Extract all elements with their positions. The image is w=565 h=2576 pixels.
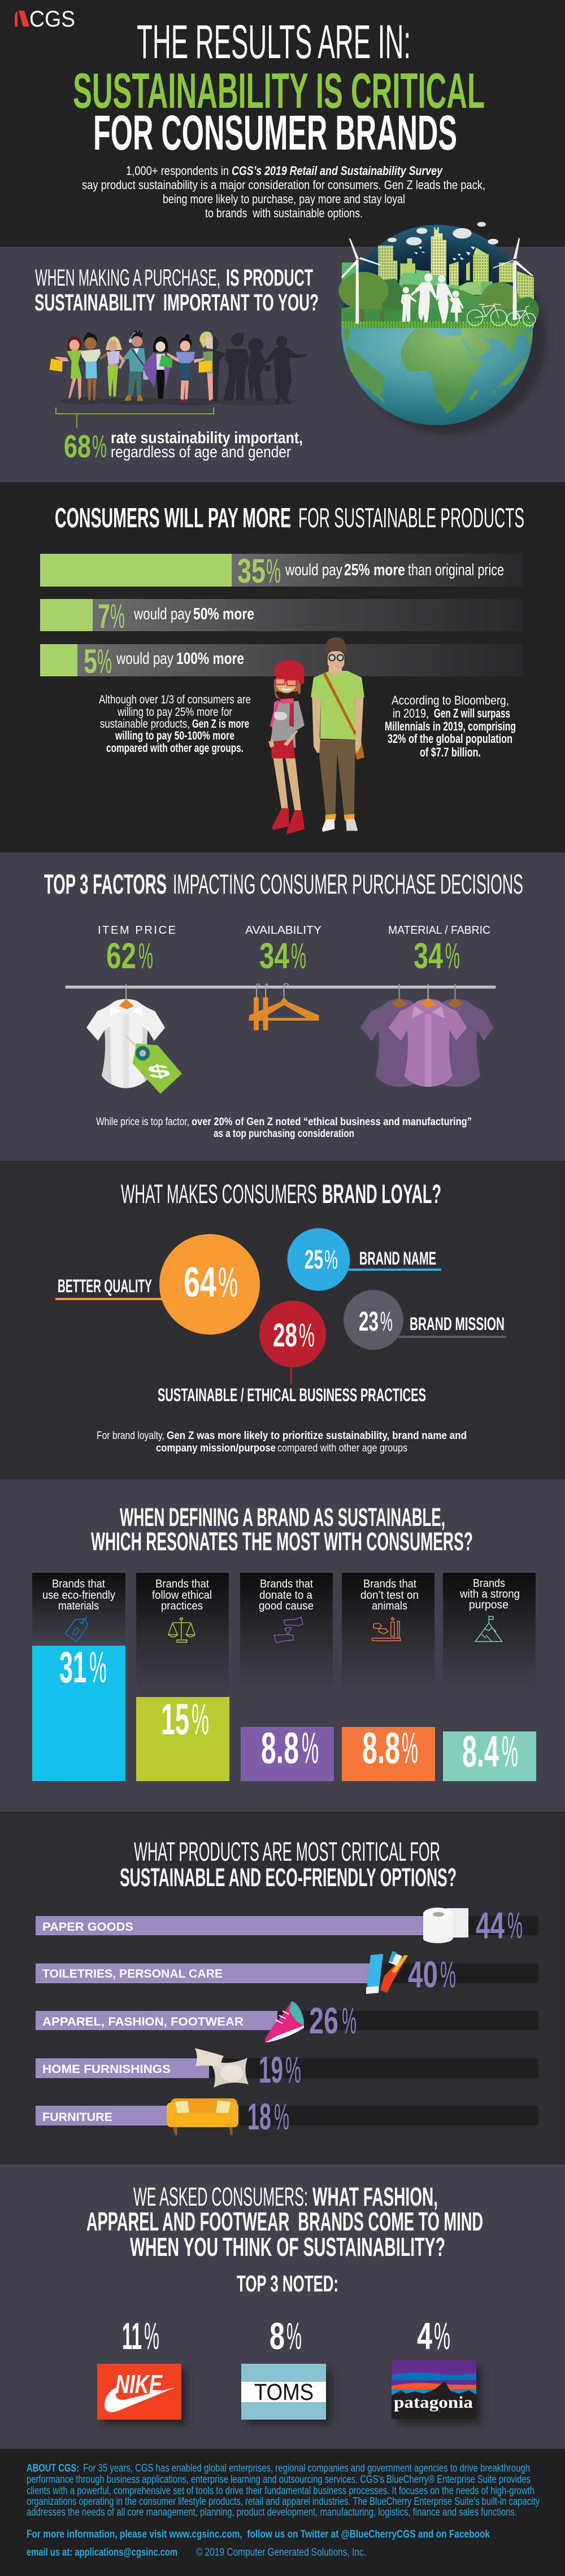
illustration: group of consumers [49, 329, 307, 405]
globe shadow [352, 243, 546, 435]
heading: WHAT FASHION, [312, 2182, 438, 2211]
bar: 35% [40, 552, 523, 590]
column: eco-friendly materials 31%: use eco-friendly [42, 1589, 115, 1602]
text: right note: of $7.7 billion. [420, 745, 481, 759]
column: good cause 8.8%: donate to a [259, 1589, 313, 1602]
bar: home furnishings 19%: HOME FURNISHINGS [42, 2063, 171, 2076]
white shirt [86, 985, 165, 1088]
bar: apparel 26% [36, 2000, 538, 2043]
bar: furniture 18%: % [274, 2096, 289, 2137]
column: eco-friendly materials 31%: materials [58, 1600, 99, 1612]
person 5 [143, 336, 173, 399]
brand: Nike: 11 [122, 2315, 142, 2358]
stat: 68% [64, 428, 303, 465]
globe lower half [341, 328, 533, 425]
column: ethical practices 15%: % [192, 1694, 209, 1744]
intro text: being more likely to purchase, pay more and stay loyal [163, 192, 405, 206]
brand: TOMS: 8 [270, 2315, 285, 2358]
birds [414, 247, 475, 261]
heading: WHAT MAKES CONSUMERS [121, 1179, 317, 1209]
icon: running shoe [265, 2001, 304, 2043]
bar: paper goods 44%: % [507, 1904, 523, 1946]
column: eco-friendly materials 31%: % [89, 1642, 107, 1692]
column: strong purpose 8.4%: purpose [469, 1599, 508, 1611]
factor: material / fabric: % [445, 935, 460, 976]
heading: WHEN MAKING A PURCHASE, [35, 264, 220, 291]
brand: Nike [97, 2315, 187, 2425]
brand: TOMS: TOMS [254, 2379, 314, 2405]
bubble: brand name 25%: BRAND NAME [359, 1248, 436, 1269]
factor: item price: ITEM PRICE [98, 924, 176, 937]
heading: TOP 3 FACTORS [44, 869, 167, 900]
footnote: as a top purchasing consideration [214, 1128, 354, 1140]
bubble: sustainable practices 28% [158, 1301, 426, 1405]
stat: 68%: 68 [64, 428, 91, 465]
intro text: 1,000+ respondents in [126, 164, 229, 178]
heading [86, 2182, 483, 2262]
text: right note: in 2019, [393, 706, 429, 720]
bubble: brand mission 23% [344, 1290, 506, 1350]
footnote: Gen Z was more likely to prioritize sustainability, brand name and [167, 1430, 467, 1442]
price tag [125, 1035, 182, 1094]
title [73, 15, 485, 160]
intro text: CGS’s 2019 Retail and Sustainability Survey [232, 164, 443, 178]
heading: WE ASKED CONSUMERS: [133, 2182, 308, 2211]
column: eco-friendly materials 31%: Brands that [52, 1578, 105, 1590]
contact links [27, 2529, 490, 2558]
bar: 7%: % [110, 597, 125, 635]
section: footer [0, 2449, 565, 2576]
stat: 68%: rate sustainability important, [111, 429, 303, 447]
column: eco-friendly materials 31%: 31 [59, 1642, 86, 1692]
factor: item price: % [138, 935, 153, 976]
about text: ABOUT CGS: [27, 2463, 79, 2474]
column: ethical practices 15%: follow ethical [152, 1589, 212, 1602]
column: no animal testing 8.8% [342, 1573, 435, 1781]
column: good cause 8.8%: Brands that [260, 1578, 313, 1590]
bar: toiletries 40%: 40 [408, 1953, 438, 1995]
brand: Patagonia: % [434, 2315, 450, 2358]
person 3 [106, 336, 125, 397]
brand: TOMS: % [286, 2315, 302, 2358]
empty hangers [249, 983, 319, 1030]
logo: CGS: CGS [29, 7, 75, 32]
brand: Nike: % [144, 2315, 159, 2358]
bubble: brand name 25%: % [324, 1244, 338, 1274]
column: no animal testing 8.8%: Brands that [363, 1578, 416, 1590]
bar: home furnishings 19%: 19 [259, 2049, 283, 2090]
section: brand loyalty [0, 1161, 565, 1480]
bar: toiletries 40% [36, 1951, 538, 1995]
bar: 7%: 50% more [193, 605, 254, 623]
bar: 5%: would pay [116, 650, 173, 668]
bar: 35%: 35 [237, 552, 266, 590]
bar: furniture 18%: 18 [247, 2096, 271, 2137]
column: strong purpose 8.4%: with a strong [459, 1588, 520, 1600]
factor: item price [98, 924, 176, 976]
factor: material / fabric: MATERIAL / FABRIC [388, 924, 490, 937]
column: strong purpose 8.4%: Brands [473, 1577, 505, 1590]
bubble: brand name 25% [287, 1228, 441, 1291]
factor: availability: 34 [259, 935, 289, 976]
skyline [342, 263, 356, 281]
bubble: brand mission 23%: 23 [359, 1307, 379, 1337]
bar: 35%: than original price [408, 561, 504, 579]
bar: 7%: would pay [133, 605, 191, 623]
text: left note: compared with other age groups. [106, 742, 244, 755]
person 7, half coloured [199, 331, 213, 401]
bar: furniture 18% [36, 2096, 538, 2137]
column: no animal testing 8.8%: % [402, 1723, 418, 1773]
globe upper half [338, 222, 539, 328]
text: left note: Gen Z is more [192, 718, 249, 731]
text: right note: Gen Z will surpass [434, 706, 510, 720]
heading [44, 869, 523, 900]
heading: IS PRODUCT [226, 264, 313, 291]
girl [268, 660, 305, 834]
footnote: For brand loyalty, [97, 1430, 164, 1442]
icon: paper roll [423, 1908, 468, 1943]
illustration: gen z characters [268, 637, 364, 834]
text: right note: 32% of the global population [388, 732, 512, 746]
family [401, 273, 464, 323]
wind turbines [341, 238, 533, 323]
bar: paper goods 44%: PAPER GOODS [42, 1921, 133, 1934]
heading: BRAND LOYAL? [322, 1179, 441, 1209]
clothes rail [65, 986, 496, 989]
bar: 5%: % [97, 642, 112, 680]
purple shirts, back [360, 984, 494, 1087]
heading: CONSUMERS WILL PAY MORE [55, 503, 291, 533]
bubble: better quality 64%: 64 [184, 1258, 216, 1306]
price tag: $ [145, 1060, 173, 1082]
factor: availability: AVAILABILITY [245, 924, 321, 937]
heading [91, 1503, 473, 1556]
section: defining sustainable brands [0, 1480, 565, 1812]
intro text [82, 164, 485, 220]
bar: apparel 26%: % [342, 2000, 357, 2041]
about text [27, 2463, 540, 2518]
bar: paper goods 44% [36, 1904, 538, 1946]
bar: paper goods 44%: 44 [476, 1904, 505, 1946]
bubble: brand mission 23%: BRAND MISSION [410, 1314, 505, 1334]
bubble: brand mission 23%: % [380, 1307, 393, 1337]
bar: 7%: 7 [98, 597, 110, 635]
bubble: sustainable practices 28%: % [299, 1317, 315, 1354]
icon: pillows [195, 2048, 249, 2088]
bar: toiletries 40%: % [440, 1953, 456, 1995]
bubble: better quality 64%: % [218, 1258, 238, 1306]
text: left note: sustainable products, [100, 718, 190, 731]
intro text: say product sustainability is a major consideration for consumers. Gen Z leads the pack, [82, 178, 485, 192]
text: right note [385, 693, 516, 759]
brand: Nike: NIKE [115, 2369, 163, 2399]
brand: Patagonia [392, 2315, 482, 2425]
column: good cause 8.8%: 8.8 [261, 1723, 299, 1773]
person 6 [167, 334, 205, 401]
footnote: compared with other age groups [277, 1442, 407, 1454]
column: ethical practices 15% [136, 1573, 229, 1781]
column: good cause 8.8% [240, 1573, 334, 1781]
text: left note: willing to pay 25% more for [117, 706, 232, 719]
column: ethical practices 15%: practices [161, 1600, 203, 1612]
bubble: better quality 64%: BETTER QUALITY [58, 1276, 152, 1296]
column: no animal testing 8.8%: 8.8 [362, 1723, 400, 1773]
section: top 3 factors [0, 852, 565, 1161]
heading [120, 1836, 457, 1892]
text: left note [99, 693, 251, 755]
illustration: clothing on rail [86, 983, 494, 1094]
brand: Patagonia: 4 [417, 2315, 432, 2358]
section: brands that come to mind [0, 2164, 565, 2449]
factor: material / fabric: 34 [414, 935, 443, 976]
heading [34, 264, 319, 316]
footnote: While price is top factor, [96, 1116, 189, 1128]
bar: 7% [40, 597, 523, 635]
icons: line icons row [65, 1616, 502, 1643]
factor: availability [245, 924, 321, 976]
bar: 5%: 5 [84, 642, 97, 680]
column: eco-friendly materials 31% [32, 1573, 125, 1781]
bar: toiletries 40%: TOILETRIES, PERSONAL CARE [42, 1967, 223, 1980]
footnote [96, 1116, 472, 1140]
brand: TOMS [241, 2315, 332, 2425]
column: good cause 8.8%: good cause [259, 1600, 314, 1612]
bracket [56, 408, 214, 428]
text: right note: According to Bloomberg, [392, 693, 509, 707]
clouds [388, 222, 498, 246]
column: strong purpose 8.4%: 8.4 [462, 1726, 499, 1776]
intro text: to brands with sustainable options. [205, 206, 363, 220]
silhouettes [211, 333, 307, 404]
text: left note: Although over 1/3 of consumers are [99, 693, 251, 706]
column: strong purpose 8.4% [443, 1573, 536, 1781]
brand: Patagonia: patagonia [394, 2393, 473, 2412]
text: right note: Millennials in 2019, comprising [385, 719, 516, 733]
bicycles [467, 304, 536, 326]
section: products most critical [0, 1812, 565, 2164]
icon: lab test [372, 1617, 401, 1641]
person 1 [49, 336, 82, 400]
footnote: over 20% of Gen Z noted “ethical business and manufacturing” [192, 1116, 472, 1128]
footnote: company mission/purpose [156, 1442, 276, 1454]
column: no animal testing 8.8%: don’t test on [360, 1589, 419, 1602]
bar: home furnishings 19%: % [285, 2049, 301, 2090]
column: strong purpose 8.4%: % [502, 1726, 518, 1776]
illustration: eco globe [338, 222, 546, 435]
bar: 35%: % [266, 552, 281, 590]
stat: 68%: regardless of age and gender [111, 443, 291, 461]
purple shirt, front [389, 984, 467, 1087]
person 4 [123, 329, 149, 401]
contact links: email us at: applications@cgsinc.com [27, 2547, 177, 2558]
section: consumers will pay more [0, 482, 565, 852]
column: good cause 8.8%: % [302, 1723, 319, 1773]
guy [311, 637, 364, 832]
ground and trees [341, 284, 534, 328]
column: no animal testing 8.8%: animals [372, 1600, 407, 1612]
bar: 35%: would pay [285, 561, 342, 579]
bar: 35%: 25% more [344, 561, 405, 579]
bar: furniture 18%: FURNITURE [42, 2111, 112, 2124]
bar: 5% [40, 642, 523, 680]
stat: 68%: % [92, 428, 107, 465]
section: importance of sustainability [0, 247, 565, 482]
icon: mountain flag [475, 1616, 502, 1642]
person 2 [81, 332, 108, 401]
bar: apparel 26%: 26 [309, 2000, 338, 2041]
heading: SUSTAINABILITY IMPORTANT TO YOU? [34, 289, 319, 316]
icon: giving hands [274, 1617, 303, 1643]
bar: 5%: 100% more [176, 650, 244, 668]
icon: sofa [167, 2098, 238, 2135]
icon: eco tag [65, 1616, 88, 1642]
bar: home furnishings 19% [36, 2048, 538, 2090]
icon: scales [168, 1618, 195, 1642]
section: header [0, 0, 565, 247]
icon: toothpaste and brush [366, 1951, 408, 1994]
factor: material / fabric [388, 924, 490, 976]
column: ethical practices 15%: Brands that [155, 1578, 209, 1590]
bubble: sustainable practices 28%: 28 [273, 1317, 297, 1354]
factor: item price: 62 [106, 935, 136, 976]
bubble: brand name 25%: 25 [305, 1244, 323, 1274]
contact links: © 2019 Computer Generated Solutions, Inc. [196, 2547, 366, 2558]
footnote [97, 1430, 467, 1454]
subheading: TOP 3 NOTED: [237, 2271, 338, 2297]
factor: availability: % [291, 935, 306, 976]
column: ethical practices 15%: 15 [161, 1694, 189, 1744]
bubble: better quality 64% [55, 1234, 260, 1335]
bar: apparel 26%: APPAREL, FASHION, FOOTWEAR [42, 2015, 244, 2028]
text: left note: willing to pay 50-100% more [115, 729, 234, 742]
